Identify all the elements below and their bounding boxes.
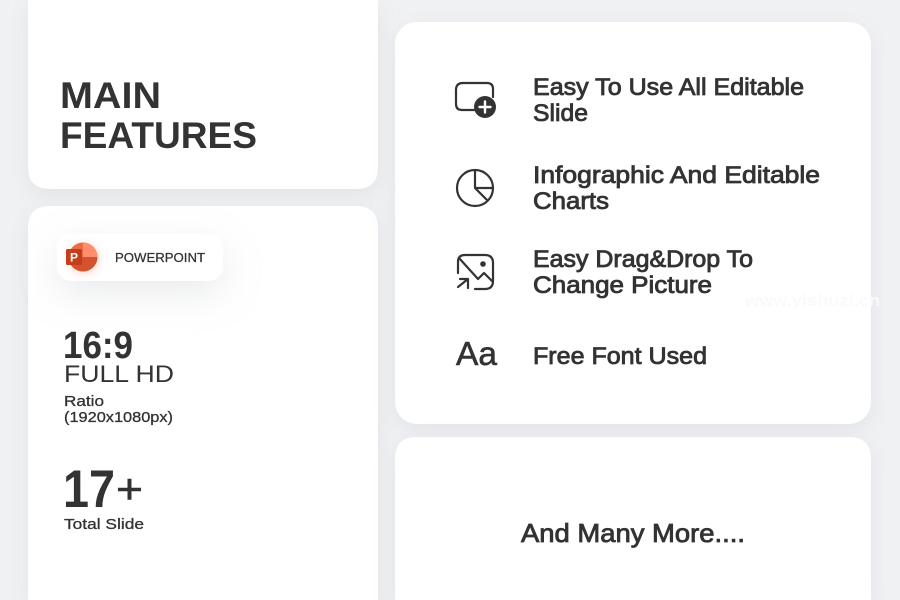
stat: 17+ total slide: 17 <box>63 460 115 519</box>
feature: charts: Charts <box>533 188 609 215</box>
icon: pie chart <box>457 170 493 206</box>
heading: main features: MAIN <box>60 75 161 116</box>
stat: 16:9 full hd ratio: (1920x1080px) <box>64 409 173 426</box>
stat: 16:9 full hd ratio: 16:9 <box>63 325 133 367</box>
feature: charts: Infographic And Editable <box>533 162 820 189</box>
stat: 16:9 full hd ratio: Ratio <box>64 393 104 410</box>
panel: and many more card <box>395 437 871 600</box>
text: and many more: And Many More.... <box>521 518 745 548</box>
feature: easy to use: Easy To Use All Editable <box>533 74 804 101</box>
panel: features list card <box>395 22 871 424</box>
stat: 16:9 full hd ratio <box>63 325 174 426</box>
stat: 17+ total slide <box>63 460 144 533</box>
icon: powerpoint logo <box>66 242 98 273</box>
badge: powerpoint: POWERPOINT <box>115 251 205 265</box>
heading: main features: FEATURES <box>60 115 257 156</box>
stat: 16:9 full hd ratio: FULL HD <box>64 361 174 388</box>
icon: slide with plus <box>456 83 496 118</box>
stat: 17+ total slide: + <box>116 465 143 512</box>
feature: charts <box>457 162 820 215</box>
badge: powerpoint <box>57 234 223 281</box>
panel: main features title card <box>28 0 378 189</box>
feature: free font: Free Font Used <box>533 343 707 370</box>
feature: drag and drop <box>458 246 753 299</box>
feature: drag and drop: Easy Drag&Drop To <box>533 246 753 273</box>
panel: specifications card <box>28 206 378 600</box>
feature: easy to use <box>456 74 804 127</box>
feature: free font <box>456 335 707 372</box>
icon: powerpoint logo: P <box>70 250 78 264</box>
icon: Aa glyph: Aa <box>456 335 498 372</box>
icon: picture with arrow <box>458 255 493 289</box>
stat: 17+ total slide: Total Slide <box>64 516 144 533</box>
feature: drag and drop: Change Picture <box>533 272 712 299</box>
heading: main features <box>60 75 257 156</box>
feature: easy to use: Slide <box>533 100 588 127</box>
watermark: www.yishuzi.cn <box>744 291 880 310</box>
